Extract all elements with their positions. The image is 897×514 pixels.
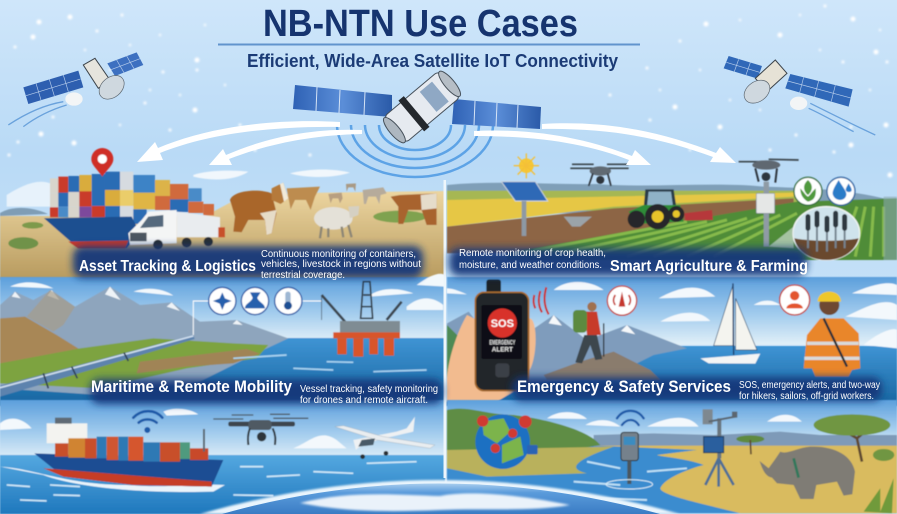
cargo ship hull	[44, 217, 140, 249]
plant icon	[794, 177, 822, 205]
sun	[514, 153, 539, 178]
title divider	[218, 44, 640, 46]
satellite: central	[293, 65, 541, 149]
pipeline	[0, 335, 195, 397]
acacia trees	[736, 414, 894, 462]
worker alert icon	[780, 285, 810, 315]
starfield	[8, 4, 892, 178]
heading: emergency & safety services: Emergency & Safety Services	[517, 378, 731, 396]
title: NB-NTN Use Cases	[263, 3, 578, 45]
description: agriculture: moisture, and weather conditions.	[459, 260, 602, 271]
survey drones	[564, 164, 629, 227]
label band: emergency	[512, 377, 882, 401]
sos device in hand: SOS	[491, 318, 514, 330]
description: maritime: Vessel tracking, safety monitoring	[300, 384, 438, 395]
truck	[128, 210, 225, 250]
panel: emergency & safety services	[447, 277, 897, 406]
arrow: satellite to farming sensors	[542, 123, 736, 163]
signal bubble icon	[607, 286, 637, 315]
sos device in hand: ALERT	[492, 347, 513, 354]
arrow: satellite to agriculture	[474, 131, 651, 165]
arrow: satellite to asset tracking	[137, 121, 340, 162]
label band: asset tracking	[73, 246, 423, 278]
wifi signal	[617, 411, 644, 425]
description: maritime: for drones and remote aircraft.	[300, 395, 428, 406]
satellite: upper left	[8, 52, 143, 127]
container stack	[50, 172, 214, 224]
sailboat	[700, 283, 760, 364]
foreground grass	[864, 478, 894, 513]
panel: asset tracking & logistics	[0, 148, 445, 280]
weather station	[703, 409, 737, 487]
heading: asset tracking & logistics: Asset Tracking & Logistics	[79, 258, 256, 275]
sos device in hand	[447, 279, 549, 402]
panel: long-range connected vehicles	[0, 400, 445, 514]
satellite: upper right	[724, 56, 875, 135]
livestock	[230, 183, 437, 238]
sos device in hand: EMERGENCY	[489, 340, 516, 347]
signal arcs	[337, 125, 493, 177]
hiker	[573, 302, 604, 363]
description: asset tracking: Continuous monitoring of containers,	[261, 249, 416, 260]
panel: smart agriculture & farming	[447, 153, 897, 260]
description: asset tracking: vehicles, livestock in regions without	[261, 259, 421, 270]
mountains	[0, 287, 288, 395]
sea whitecaps	[7, 462, 417, 501]
label band: maritime	[90, 379, 443, 404]
heading: maritime & remote mobility: Maritime & Remote Mobility	[91, 378, 293, 396]
soil sensors inset	[769, 207, 860, 260]
location pin	[91, 148, 113, 177]
field worker	[804, 292, 860, 377]
panel: environmental monitoring	[447, 400, 897, 513]
light aircraft	[335, 417, 435, 459]
drone	[213, 414, 308, 445]
panel divider	[444, 180, 446, 478]
container ship	[0, 418, 225, 492]
label band: agriculture	[449, 248, 807, 276]
arrow: satellite to asset tracking inner	[209, 130, 362, 165]
oil rig	[322, 282, 402, 357]
description: asset tracking: terrestrial coverage.	[261, 270, 345, 281]
panel: maritime & remote mobility	[0, 274, 445, 406]
water icon	[827, 177, 855, 205]
globe with pins	[475, 414, 538, 469]
sensor mast with drone	[739, 159, 799, 247]
coastal mountains	[447, 312, 687, 385]
monitoring icons	[209, 287, 302, 315]
tractor	[628, 189, 713, 229]
water sensor	[606, 432, 653, 489]
sea highlights	[233, 355, 427, 372]
subtitle: Efficient, Wide-Area Satellite IoT Connectivity	[247, 50, 619, 71]
earth horizon	[200, 480, 680, 514]
description: emergency: for hikers, sailors, off-grid workers.	[739, 391, 874, 402]
description: agriculture: Remote monitoring of crop health,	[459, 248, 606, 259]
solar panel	[501, 182, 548, 236]
heading: smart agriculture & farming: Smart Agriculture & Farming	[610, 258, 808, 275]
wifi signal	[133, 411, 162, 432]
connector lines	[193, 301, 322, 335]
rhino	[760, 447, 855, 499]
